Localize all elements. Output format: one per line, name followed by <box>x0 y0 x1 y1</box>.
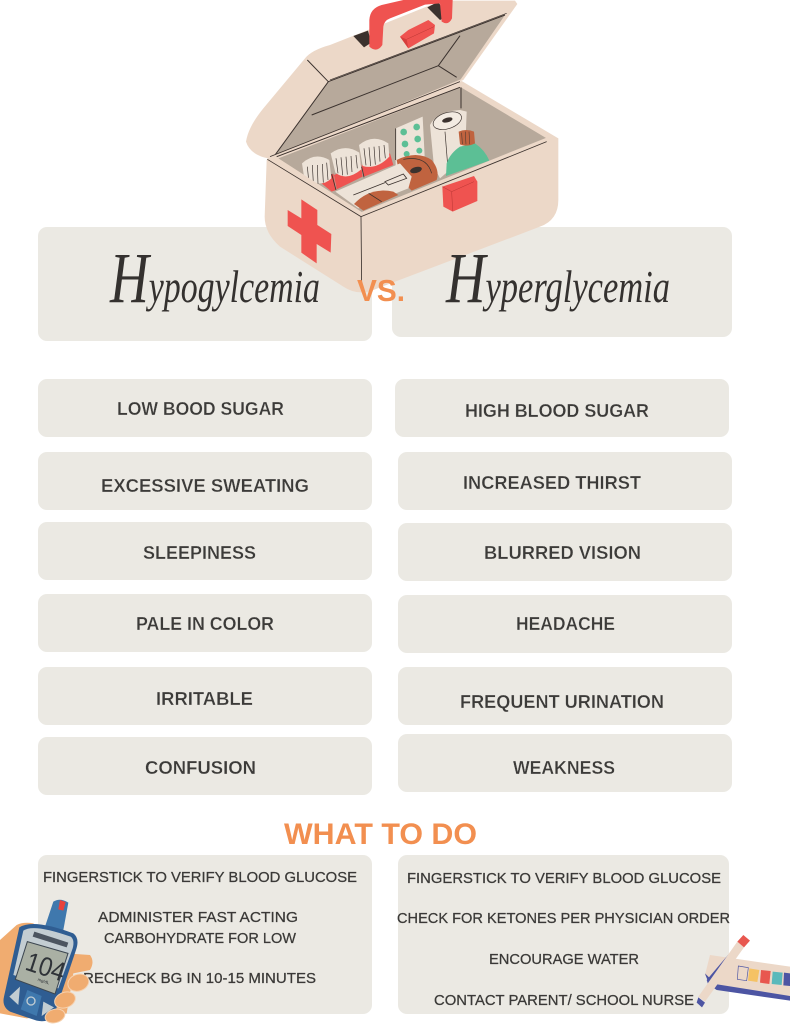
panel: hypoglycemia heading box <box>38 227 372 341</box>
icon: test strip chart with pen <box>697 935 790 1007</box>
symptom: excessive sweating <box>38 452 372 510</box>
panel: hyperglycemia actions <box>397 855 730 1014</box>
hand palm <box>0 923 92 1018</box>
meter buttons <box>9 987 54 1016</box>
pen <box>697 935 750 1007</box>
bandage roll <box>430 109 467 178</box>
title: Hyperglycemia: H yperglycemia <box>445 239 670 318</box>
symptom: blurred vision <box>398 523 732 581</box>
strip card <box>705 955 790 1001</box>
symptom: increased thirst: INCREASED THIRST <box>463 473 641 493</box>
symptom: confusion <box>38 737 372 795</box>
panel: hypoglycemia actions: CARBOHYDRATE FOR LOW <box>104 930 297 947</box>
symptom: low blood sugar <box>38 379 372 437</box>
kit handle <box>353 0 453 50</box>
symptom: pale in color: PALE IN COLOR <box>136 614 274 634</box>
symptom: sleepiness: SLEEPINESS <box>143 543 256 563</box>
symptom: high blood sugar <box>395 379 729 437</box>
panel: hypoglycemia actions: FINGERSTICK TO VERIFY BLOOD GLUCOSE <box>43 869 357 886</box>
symptom: headache: HEADACHE <box>516 614 615 634</box>
meter strip <box>45 900 68 930</box>
red cross <box>288 199 331 263</box>
symptom: blurred vision: BLURRED VISION <box>484 543 641 563</box>
green bottle <box>446 130 489 176</box>
symptom: frequent urination: FREQUENT URINATION <box>460 692 664 712</box>
icon: first aid kit <box>246 0 558 292</box>
symptom: high blood sugar: HIGH BLOOD SUGAR <box>465 401 649 421</box>
icon: glucose meter in hand <box>0 900 92 1024</box>
symptom: excessive sweating: EXCESSIVE SWEATING <box>101 476 309 496</box>
meter display <box>15 942 69 994</box>
kit front rim <box>277 87 461 287</box>
symptom: increased thirst <box>398 452 732 510</box>
panel: hyperglycemia actions: CHECK FOR KETONES PER PHYSICIAN ORDER <box>397 910 730 927</box>
panel: hyperglycemia actions: ENCOURAGE WATER <box>489 951 639 968</box>
heading: what to do: WHAT TO DO <box>284 818 477 851</box>
kit interior <box>278 87 547 213</box>
panel: hyperglycemia heading box <box>392 227 732 337</box>
meter display: 104 <box>22 947 69 988</box>
tape roll <box>397 155 438 191</box>
symptom: sleepiness <box>38 522 372 580</box>
panel: hyperglycemia actions: CONTACT PARENT/ SCHOOL NURSE <box>434 992 694 1009</box>
symptom: headache <box>398 595 732 653</box>
fingers <box>44 971 91 1024</box>
symptom: weakness: WEAKNESS <box>513 758 615 778</box>
panel: hyperglycemia symptoms <box>395 379 732 792</box>
kit front latch <box>442 176 477 212</box>
meter display: mg/dL <box>37 977 51 986</box>
kit lid <box>246 0 517 159</box>
panel: hypoglycemia actions: ADMINISTER FAST ACTING <box>98 909 298 926</box>
symptom: irritable <box>38 667 372 725</box>
kit body <box>265 81 558 292</box>
symptom: weakness <box>398 734 732 792</box>
panel: hyperglycemia actions: FINGERSTICK TO VERIFY BLOOD GLUCOSE <box>407 870 721 887</box>
three medicine bottles <box>302 139 393 192</box>
syringe wrapper <box>335 163 412 211</box>
lid latch <box>400 20 435 48</box>
symptom: frequent urination <box>398 667 732 725</box>
meter body <box>3 924 77 1021</box>
symptom: low blood sugar: LOW BOOD SUGAR <box>117 399 284 419</box>
panel: hypoglycemia actions <box>38 855 372 1014</box>
symptom: confusion: CONFUSION <box>145 758 256 778</box>
panel: hypoglycemia symptoms <box>38 379 372 795</box>
label: vs.: VS. <box>357 273 405 308</box>
title: Hypoglycemia: H ypogylcemia <box>109 239 320 318</box>
panel: hypoglycemia actions: RECHECK BG IN 10-15 MINUTES <box>83 970 316 987</box>
symptom: irritable: IRRITABLE <box>156 689 253 709</box>
symptom: pale in color <box>38 594 372 652</box>
pill blister pack <box>396 117 425 170</box>
